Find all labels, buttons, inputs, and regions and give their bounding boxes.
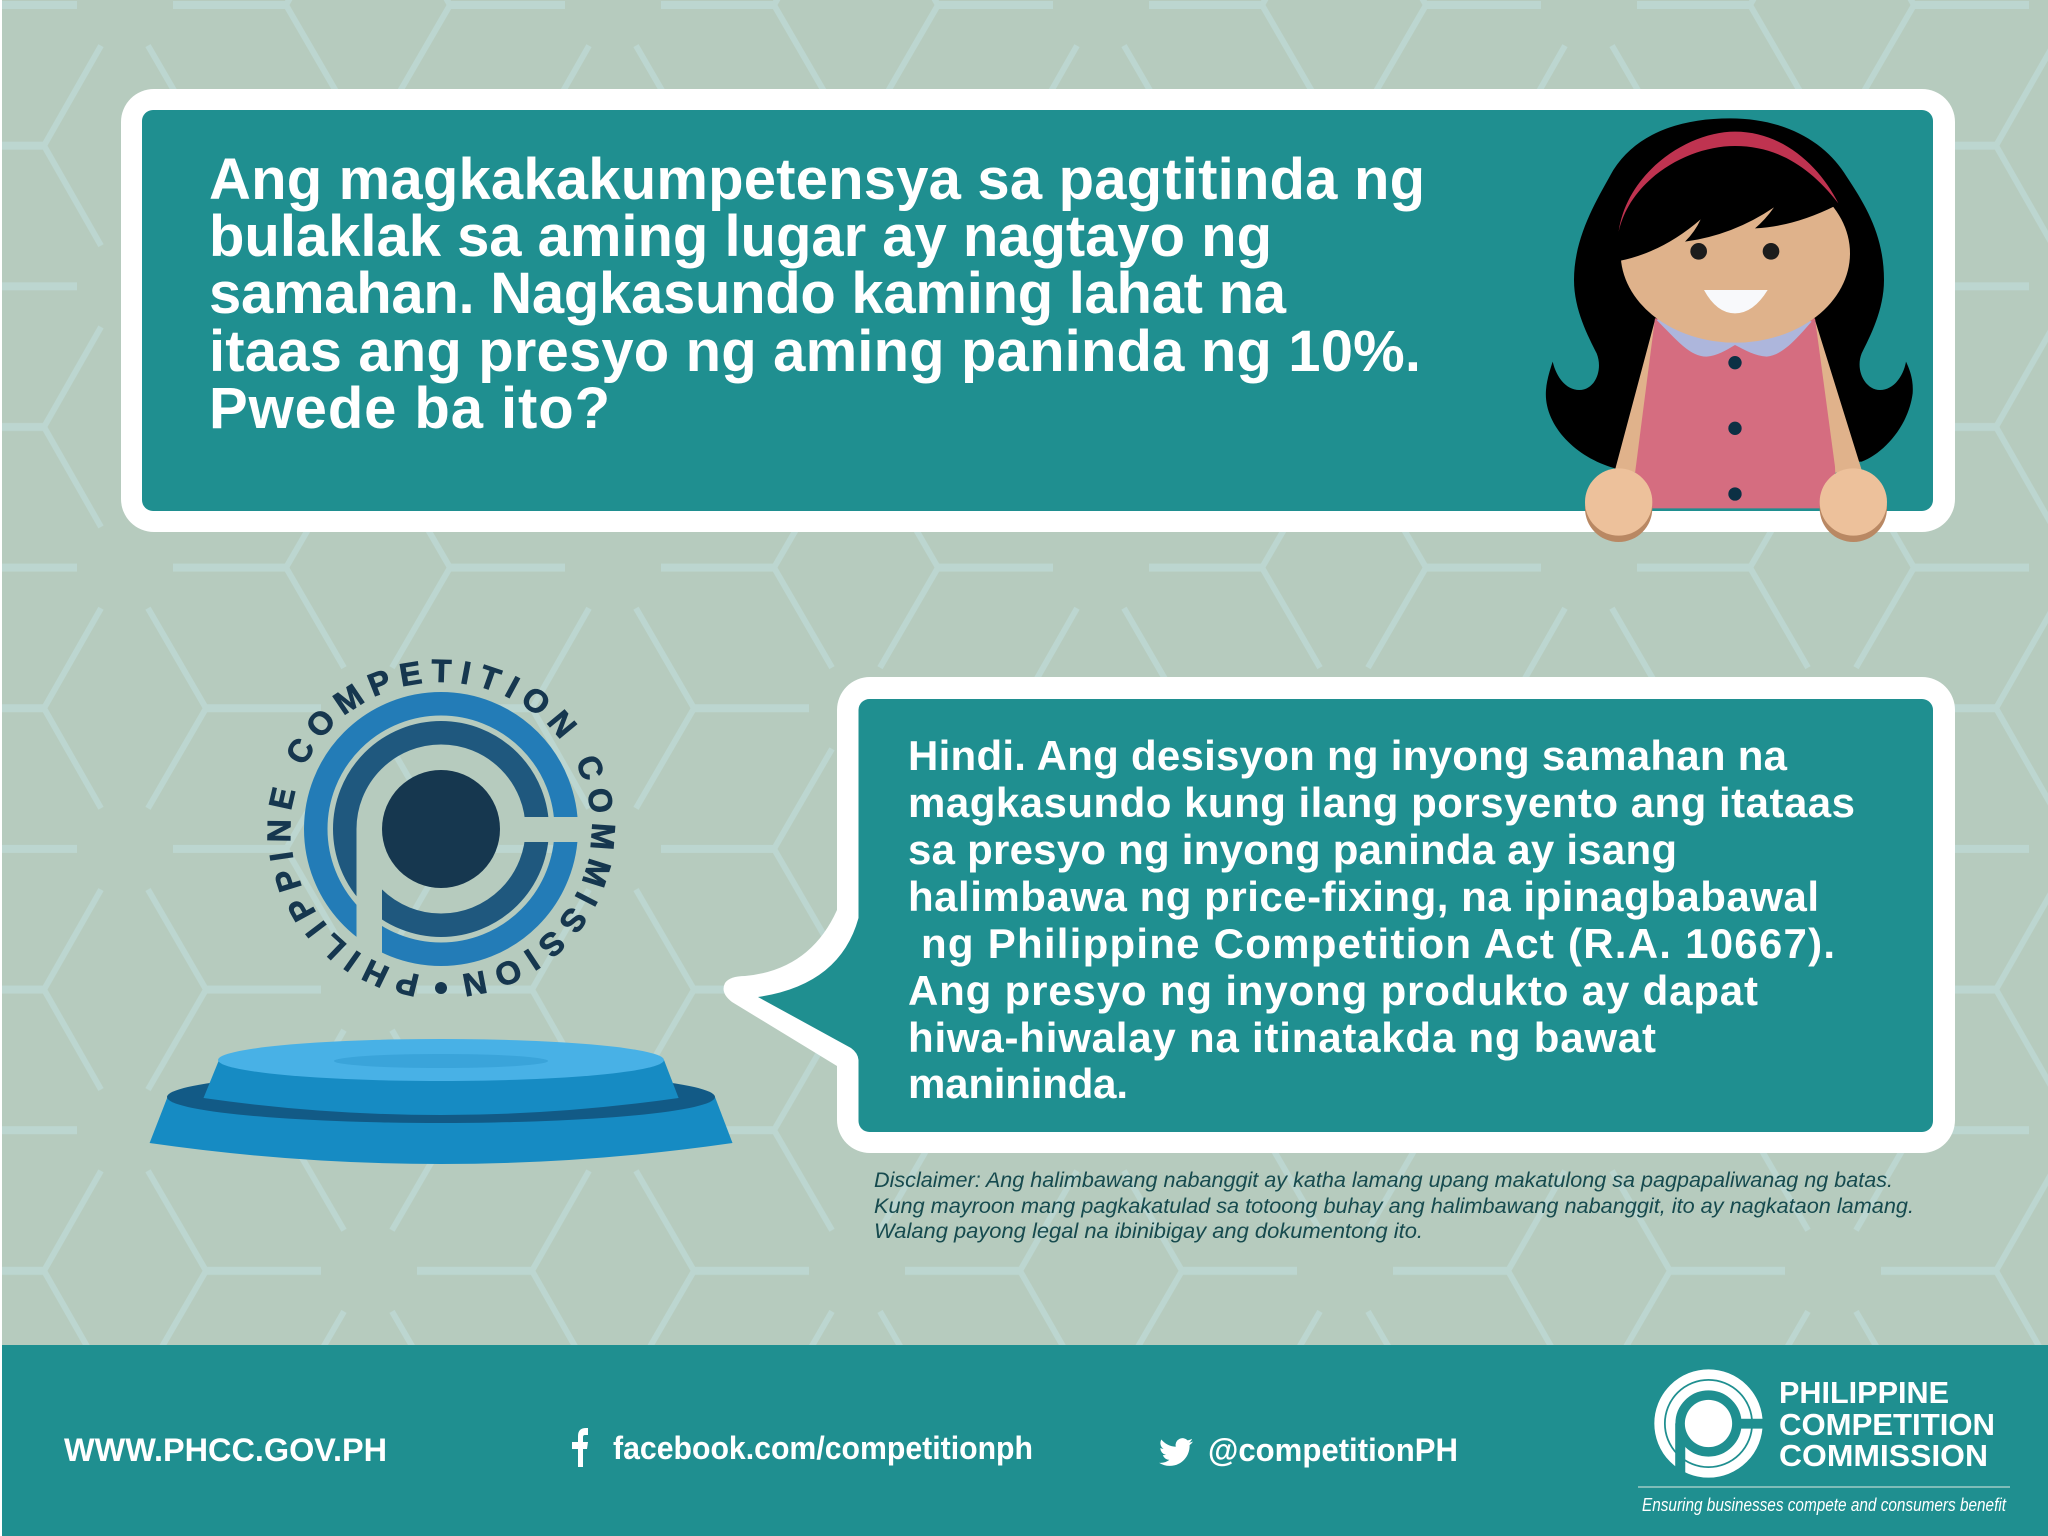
bangs xyxy=(1615,130,1839,261)
text block: answer: sa presyo ng inyong paninda ay isang xyxy=(908,826,1677,873)
text block: answer: hiwa-hiwalay na itinatakda ng bawat xyxy=(908,1014,1656,1061)
hair xyxy=(1546,118,1913,468)
smile xyxy=(1704,290,1768,313)
icon: podium xyxy=(150,1039,733,1164)
icon: PCC emblem with circular text xyxy=(267,659,616,997)
text block: question xyxy=(209,147,1425,441)
text block: answer: manininda. xyxy=(908,1060,1128,1107)
shirt xyxy=(1633,318,1837,508)
panel: question speech box xyxy=(121,89,1955,532)
left hand xyxy=(1585,468,1652,542)
circular text: PHILIPPINE COMPETITION COMMISSION xyxy=(267,659,616,997)
text block: question: samahan. Nagkasundo kaming lahat na xyxy=(209,261,1287,326)
icon: facebook xyxy=(572,1428,588,1467)
logo wordmark: COMPETITION xyxy=(1779,1407,1995,1442)
website: WWW.PHCC.GOV.PH xyxy=(64,1432,387,1468)
icon: twitter xyxy=(1159,1438,1193,1466)
text block: disclaimer: Disclaimer: Ang halimbawang nabanggit ay katha lamang upang makatulong sa pagpapaliwanag ng batas. xyxy=(874,1169,1893,1192)
text block: disclaimer: Kung mayroon mang pagkakatulad sa totoong buhay ang halimbawang nabanggit, ito ay nagkataon lamang. xyxy=(874,1195,1914,1218)
text block: answer: Ang presyo ng inyong produkto ay dapat xyxy=(908,967,1758,1014)
text block: answer: ng Philippine Competition Act (R.A. 10667). xyxy=(921,920,1835,967)
logo wordmark: COMMISSION xyxy=(1779,1438,1988,1473)
buttons xyxy=(1728,356,1742,501)
dot separator xyxy=(435,982,447,994)
text block: question: Ang magkakakumpetensya sa pagtitinda ng xyxy=(209,147,1425,212)
emblem rings xyxy=(316,704,566,954)
arms xyxy=(1615,320,1862,473)
face xyxy=(1621,164,1850,343)
text block: question: Pwede ba ito? xyxy=(209,376,610,441)
text block: disclaimer: Walang payong legal na ibinibigay ang dokumentong ito. xyxy=(874,1220,1423,1243)
text block: question: itaas ang presyo ng aming paninda ng 10%. xyxy=(209,319,1421,384)
facebook handle: facebook.com/competitionph xyxy=(613,1430,1033,1466)
icon: girl character xyxy=(1546,118,1913,542)
text block: answer: Hindi. Ang desisyon ng inyong samahan na xyxy=(908,732,1788,779)
icon: PCC logo white xyxy=(1659,1374,1758,1473)
headband xyxy=(1619,132,1838,232)
eyes xyxy=(1690,243,1779,260)
text block: answer xyxy=(908,732,1855,1107)
text block: answer: halimbawa ng price-fixing, na ipinagbabawal xyxy=(908,873,1819,920)
panel: answer speech bubble xyxy=(724,677,1955,1153)
panel: footer xyxy=(2,1345,2048,1536)
text block: answer: magkasundo kung ilang porsyento ang itataas xyxy=(908,779,1855,826)
collar xyxy=(1657,303,1812,357)
twitter handle: @competitionPH xyxy=(1208,1432,1458,1468)
logo wordmark xyxy=(1779,1375,1995,1473)
right hand xyxy=(1820,468,1887,542)
logo wordmark: PHILIPPINE xyxy=(1779,1375,1949,1410)
text block: disclaimer xyxy=(874,1169,1914,1243)
text block: question: bulaklak sa aming lugar ay nagtayo ng xyxy=(209,204,1272,269)
emblem centre disc xyxy=(382,770,500,888)
